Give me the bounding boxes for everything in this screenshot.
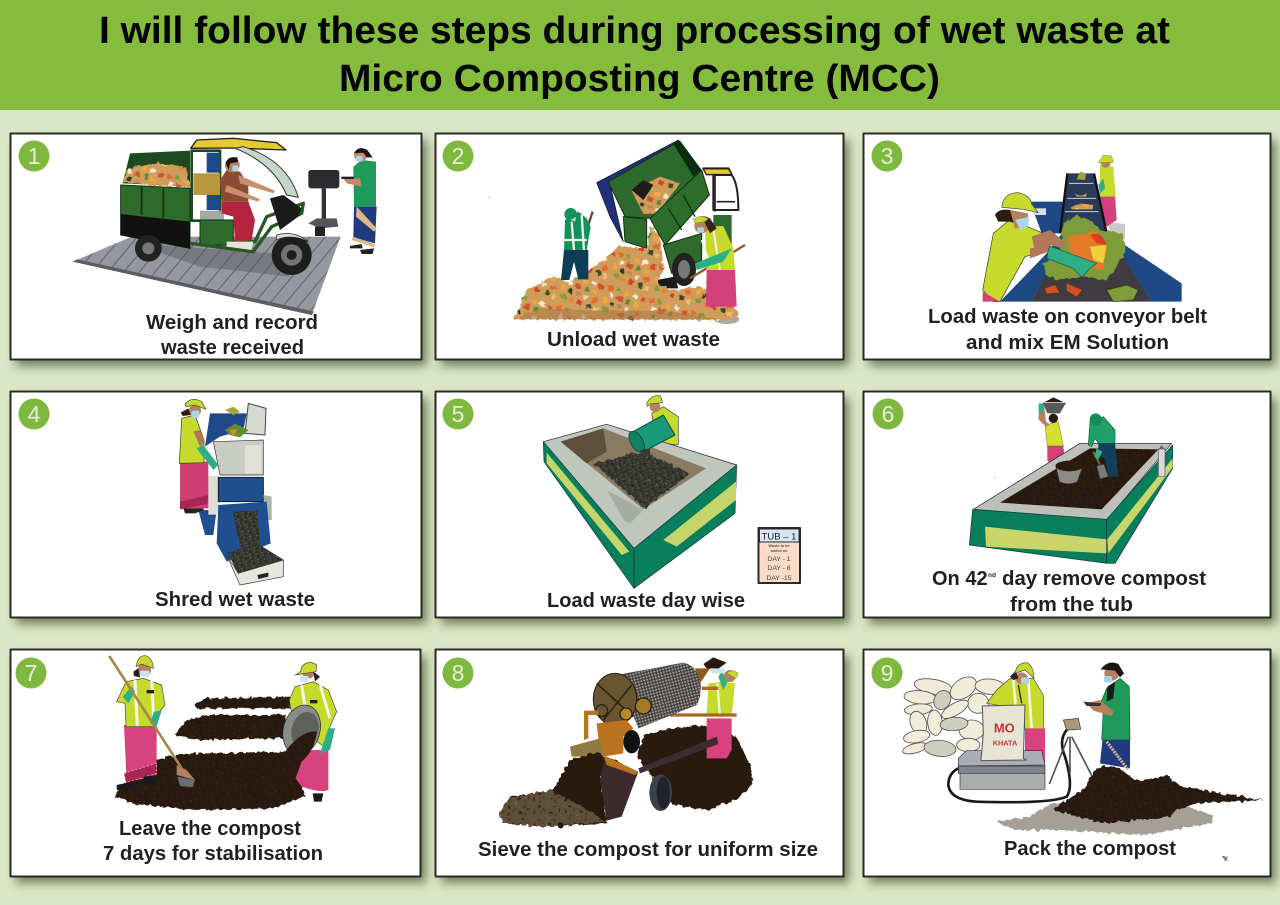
step number 5: [442, 398, 474, 430]
panel card 2: [436, 134, 844, 360]
step number 5: 5: [452, 401, 464, 427]
caption 3: [928, 306, 1207, 354]
panel card 5: [436, 392, 844, 618]
title: [99, 10, 1170, 100]
tub label card: DAY -15: [766, 575, 792, 582]
caption 3: and mix EM Solution: [966, 332, 1169, 354]
panel: step 3 conveyor: [864, 134, 1276, 366]
illustration: sieving machine: [498, 657, 753, 828]
panel card 3: [864, 134, 1270, 360]
illustration: loading conveyor belt: [983, 155, 1182, 302]
panel: step 6 remove compost: [864, 392, 1276, 624]
step number 6: 6: [882, 401, 894, 427]
tub label card: DAY - 1: [767, 556, 791, 563]
caption 1: [146, 312, 318, 359]
tub label card: Waste to be: [768, 544, 790, 548]
caption 8: Sieve the compost for uniform size: [478, 839, 818, 861]
caption 4: Shred wet waste: [155, 589, 315, 611]
step number 4: 4: [28, 401, 41, 427]
step number 8: 8: [452, 660, 464, 686]
caption 1: waste received: [160, 337, 304, 359]
illustration: workers removing compost: [969, 397, 1173, 563]
caption 6: On 42: [932, 568, 988, 590]
panel: step 4 shred: [10, 392, 427, 624]
illustration: e-rickshaw on weighbridge: [73, 138, 377, 315]
panel card 9: [864, 650, 1270, 876]
panel: step 5 load day wise: [436, 392, 849, 624]
caption 6: nd: [988, 572, 996, 579]
panel card 7: [10, 650, 420, 876]
tub label card: DAY - 8: [767, 565, 791, 572]
step number 1: [18, 140, 50, 172]
panel: step 1 weigh and record: [10, 134, 427, 366]
caption 1: Weigh and record: [146, 312, 318, 334]
illustration: packing compost: MO: [994, 721, 1015, 736]
step number 9: [872, 658, 902, 688]
caption 9: Pack the compost: [1004, 838, 1176, 860]
step number 3: [872, 140, 902, 172]
panel card 4: [10, 392, 422, 618]
caption 3: Load waste on conveyor belt: [928, 306, 1207, 328]
illustration: packing compost: KHATA: [993, 738, 1018, 747]
panel: step 9 pack: [864, 650, 1276, 883]
step number 4: [18, 398, 50, 430]
panel: step 2 unload: [436, 134, 849, 366]
panel: step 8 sieve: [436, 650, 849, 883]
step number 8: [442, 658, 474, 688]
panel: step 7 stabilisation: [10, 650, 426, 883]
step number 2: [442, 140, 474, 172]
caption 2: Unload wet waste: [547, 329, 720, 351]
caption 5: Load waste day wise: [547, 590, 745, 612]
title: I will follow these steps during processing of wet waste at: [99, 10, 1170, 52]
caption 7: [103, 818, 323, 865]
caption 7: Leave the compost: [119, 818, 301, 840]
caption 7: 7 days for stabilisation: [103, 843, 323, 865]
step number 2: 2: [452, 143, 464, 169]
illustration: tipper unloading waste: [489, 140, 745, 324]
illustration: packing compost: [902, 663, 1263, 862]
illustration: loading tub with bucket: [543, 396, 737, 588]
illustration: shredding machine: [179, 399, 283, 585]
panel card 1: [10, 134, 422, 360]
step number 1: 1: [28, 143, 40, 169]
header band: [0, 0, 1280, 110]
step number 7: [16, 658, 46, 688]
panel card 8: [436, 650, 844, 876]
tub label card: added on: [771, 549, 788, 553]
panel card 6: [864, 392, 1270, 618]
illustration: spreading compost: [109, 656, 337, 810]
caption 6: day remove compost: [1002, 568, 1206, 590]
caption 6: from the tub: [1010, 594, 1133, 616]
step number 3: 3: [881, 143, 893, 169]
step number 7: 7: [25, 660, 37, 686]
caption 6: [932, 568, 1206, 616]
tub label card: TUB – 1: [762, 532, 796, 542]
title: Micro Composting Centre (MCC): [339, 58, 940, 100]
step number 9: 9: [881, 660, 893, 686]
tub label card: [758, 528, 800, 583]
step number 6: [872, 398, 904, 430]
